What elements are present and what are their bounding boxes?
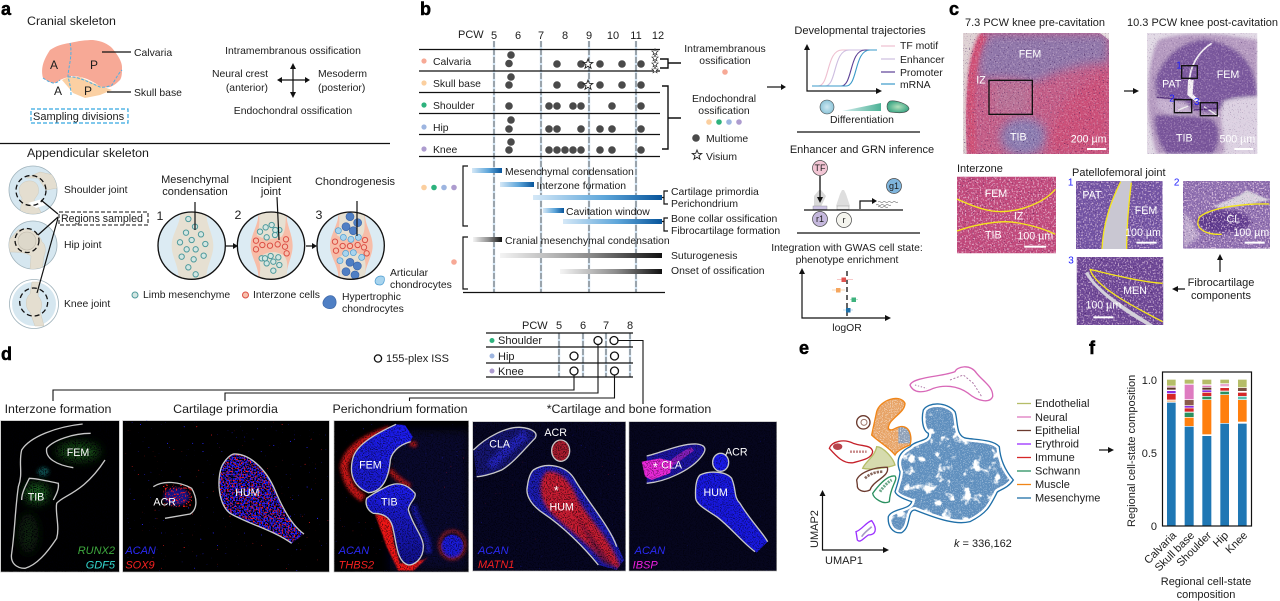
divider — [0, 142, 390, 144]
image: patellofemoral close-up 3: MEN — [1123, 285, 1147, 297]
ISS sample markers — [570, 336, 618, 375]
image: patellofemoral close-up 3: 3 — [1068, 256, 1074, 267]
analysis: enhancer and GRN inference: TF — [814, 163, 826, 173]
timeline axis: post-conception weeks: 9 — [586, 30, 592, 42]
developmental windows: appendicular: Mesenchymal condensation — [505, 167, 634, 178]
image: post-cavitation knee section: FEM — [1217, 69, 1239, 81]
divider — [797, 131, 920, 133]
image: post-cavitation knee section: PAT — [1162, 78, 1182, 90]
image: post-cavitation knee section: 1 — [1176, 60, 1182, 71]
y axis ticks: 0.5 — [1142, 448, 1157, 460]
image: ACAN IBSP section: ACR — [725, 447, 748, 459]
cluster: mesenchyme — [887, 400, 1017, 537]
analysis: GWAS integration forest plot: phenotype enrichment — [796, 255, 899, 266]
panel c: knee histology — [949, 0, 1278, 325]
analysis: developmental trajectories — [794, 25, 945, 126]
arrow between sections — [1124, 88, 1139, 94]
timeline axis: post-conception weeks: 5 — [491, 30, 497, 42]
stage labels: Chondrogenesis — [315, 176, 396, 188]
stage 1: mesenchymal condensation — [158, 210, 225, 282]
connectors from ISS samples to sections — [53, 340, 643, 404]
ossification axis diagram: Endochondral ossification — [234, 106, 352, 117]
label: hip joint: Hip joint — [64, 240, 102, 251]
callout: fibrocartilage components: Fibrocartilage — [1188, 277, 1254, 289]
section headings: Cartilage primordia — [173, 402, 278, 416]
analysis: developmental trajectories: TF motif — [900, 41, 938, 52]
label: skull base — [107, 88, 182, 99]
heading: appendicular skeleton: Appendicular skeleton — [27, 146, 149, 160]
ossification axis diagram: (anterior) — [226, 83, 268, 94]
image: ACAN SOX9 section: SOX9 — [125, 560, 155, 572]
image: interzone close-up: 100 µm — [1017, 231, 1053, 243]
cluster: epithelial large — [857, 467, 888, 491]
timeline axis: post-conception weeks: 12 — [652, 30, 664, 42]
bar: Knee — [1238, 380, 1247, 526]
ossification brackets and legend: Endochondral — [692, 94, 756, 105]
legend: cell classes: Schwann — [1035, 466, 1080, 478]
ISS sampling table: 6 — [580, 320, 586, 332]
label: calvaria — [102, 48, 172, 59]
ossification axis diagram: Intramembranous ossification — [225, 46, 361, 57]
legend: cell classes: Erythroid — [1035, 438, 1079, 450]
legend: cell types: Interzone cells — [253, 290, 320, 301]
developmental windows: cranial — [451, 236, 765, 292]
cluster: erythroid — [856, 521, 875, 541]
panel e: UMAP — [799, 338, 1114, 567]
timeline axis: post-conception weeks: 11 — [630, 30, 642, 42]
image: ACAN THBS2 section: TIB — [381, 497, 398, 509]
legend: cell classes: Immune — [1035, 452, 1075, 464]
image: ACAN THBS2 section: THBS2 — [339, 560, 374, 572]
developmental windows: appendicular: Perichondrium — [671, 199, 738, 210]
stage labels: 3 — [316, 208, 323, 222]
legend: 155-plex ISS: 155-plex ISS — [386, 353, 449, 365]
cluster: neural — [910, 367, 993, 401]
analysis: enhancer and GRN inference — [790, 144, 934, 228]
ISS sampling table: Hip — [498, 351, 515, 363]
bar: Hip — [1220, 380, 1229, 526]
analysis: GWAS integration forest plot: Integration with GWAS cell state: — [771, 243, 923, 254]
image: ACAN IBSP section — [629, 422, 777, 572]
timeline axis: post-conception weeks: 6 — [515, 30, 521, 42]
image: patellofemoral close-up 1: 1 — [1068, 177, 1074, 188]
image: RUNX2 GDF5 section: TIB — [28, 492, 44, 504]
stage labels: condensation — [162, 186, 228, 198]
UMAP clusters — [829, 367, 1017, 541]
stage 3: chondrogenesis — [317, 210, 384, 282]
section headings: *Cartilage and bone formation — [547, 402, 711, 416]
developmental windows: cranial: Cranial mesenchymal condensation — [505, 236, 670, 247]
ossification axis diagram: Mesoderm — [318, 69, 367, 80]
image: ACAN IBSP section: HUM — [704, 487, 728, 499]
analysis: developmental trajectories: mRNA — [900, 80, 931, 91]
developmental windows: appendicular — [421, 166, 780, 237]
stage 2: incipient joint — [237, 210, 305, 282]
legend: cell types: Hypertrophic — [342, 292, 401, 303]
image: interzone close-up: TIB — [985, 230, 1002, 242]
analysis: developmental trajectories: Differentiation — [830, 115, 894, 126]
x axis labels: Shoulder — [1174, 529, 1214, 569]
image: ACAN MATN1 section: CLA — [489, 438, 511, 450]
image: ACAN IBSP section: * — [653, 461, 658, 475]
image: post-cavitation knee section: TIB — [1176, 133, 1193, 145]
legend: cell classes: Mesenchyme — [1035, 492, 1100, 504]
image: post-cavitation knee section: 2 — [1169, 93, 1175, 104]
image: pre-cavitation knee section: 200 µm — [1071, 134, 1107, 146]
title: pre-cavitation: 7.3 PCW knee pre-cavitation — [965, 17, 1105, 29]
image: RUNX2 GDF5 section: RUNX2 — [78, 545, 115, 557]
label: skull base: Skull base — [134, 88, 182, 99]
image: post-cavitation knee section: 3 — [1194, 97, 1200, 108]
legend: sampling divisions: Sampling divisions — [33, 111, 125, 123]
image: patellofemoral close-up 1 — [1068, 177, 1163, 249]
image: patellofemoral close-up 2: 2 — [1174, 177, 1180, 188]
ISS sampling table — [486, 320, 633, 378]
callout: regions sampled: Regions sampled — [61, 213, 143, 225]
sample table rows: Knee — [433, 145, 457, 156]
legend: cell classes — [1017, 398, 1100, 504]
sample table rows: Calvaria — [433, 57, 471, 68]
y axis ticks: 1.0 — [1142, 375, 1157, 387]
legend: cell classes: Epithelial — [1035, 425, 1080, 437]
image: ACAN MATN1 section: HUM — [550, 501, 574, 513]
ossification brackets and legend: ossification — [698, 106, 750, 117]
image: patellofemoral close-up 1: PAT — [1082, 189, 1102, 201]
legend: cell classes: Endothelial — [1035, 398, 1089, 410]
image: post-cavitation knee section: 500 µm — [1219, 134, 1255, 146]
stage labels: 2 — [235, 208, 242, 222]
analysis: developmental trajectories: Promoter — [900, 68, 943, 79]
image: ACAN IBSP section: CLA — [661, 459, 683, 471]
UMAP axes — [809, 490, 889, 567]
icon: shoulder joint — [9, 166, 58, 214]
ISS sampling table: 5 — [556, 320, 562, 332]
icon: skull with calvaria and skull base: A — [54, 84, 62, 98]
arrow to composition chart — [1099, 447, 1114, 453]
analysis: developmental trajectories: Developmental trajectories — [794, 25, 926, 37]
image: patellofemoral close-up 1: FEM — [1135, 205, 1157, 217]
stage labels: joint — [260, 186, 281, 198]
x axis title: composition — [1177, 589, 1235, 601]
stage labels: Mesenchymal — [161, 174, 229, 186]
section headings — [5, 402, 711, 416]
legend: cell types: chondrocytes — [342, 304, 404, 315]
annotation: cell count: k = 336,162 — [954, 538, 1012, 550]
image: pre-cavitation knee section: TIB — [1010, 131, 1027, 143]
callout: fibrocartilage components: components — [1191, 290, 1251, 302]
sample table rows: Skull base — [433, 79, 481, 90]
x axis labels: Hip — [1211, 530, 1231, 550]
icon: skull with calvaria and skull base — [42, 40, 122, 98]
image: patellofemoral close-up 3 — [1068, 256, 1163, 325]
image: ACAN THBS2 section: FEM — [359, 459, 382, 471]
image: patellofemoral close-up 2 — [1174, 177, 1270, 249]
developmental windows: appendicular: Interzone formation — [536, 181, 626, 192]
panel label f: f — [1089, 338, 1096, 358]
cluster: immune — [829, 441, 873, 463]
stage labels — [157, 174, 396, 223]
developmental windows: cranial: Suturogenesis — [671, 251, 737, 262]
x axis labels: Calvaria — [1142, 529, 1180, 567]
image: ACAN THBS2 section: ACAN — [338, 545, 369, 557]
stage labels: 1 — [157, 209, 164, 223]
developmental windows: appendicular: Bone collar ossification — [671, 214, 777, 225]
icon: skull with calvaria and skull base: P — [90, 58, 98, 72]
image: ACAN SOX9 section: ACAN — [124, 545, 156, 557]
ossification brackets and legend: Visium — [706, 152, 737, 163]
x axis labels: Knee — [1223, 530, 1250, 556]
callout: fibrocartilage components — [1172, 254, 1254, 302]
panel label e: e — [799, 338, 809, 358]
image: pre-cavitation knee section: FEM — [1019, 48, 1041, 60]
image: ACAN SOX9 section: HUM — [235, 487, 259, 499]
UMAP axes: UMAP2 — [809, 510, 821, 548]
ISS sampling table: 8 — [627, 320, 633, 332]
cluster: endothelial — [863, 447, 895, 469]
sample table rows — [419, 50, 660, 156]
y axis ticks: 0 — [1151, 521, 1157, 533]
histology group — [957, 17, 1278, 325]
heading: interzone: Interzone — [957, 163, 1003, 175]
section headings: Perichondrium formation — [333, 402, 468, 416]
timeline axis: post-conception weeks: 10 — [607, 30, 619, 42]
image: ACAN MATN1 section: MATN1 — [478, 559, 514, 571]
timeline axis: post-conception weeks: PCW — [458, 29, 484, 41]
analysis: enhancer and GRN inference: g1 — [889, 181, 899, 191]
analysis: developmental trajectories: Enhancer — [900, 55, 945, 66]
section headings: Interzone formation — [5, 402, 111, 416]
ossification brackets and legend: ossification — [699, 56, 751, 67]
icon: knee joint — [10, 280, 58, 328]
image: post-cavitation knee section — [1147, 33, 1257, 154]
pointer lines and arrows between stages — [195, 197, 357, 249]
image: interzone close-up — [957, 177, 1056, 253]
x axis title: Regional cell-state — [1161, 576, 1251, 588]
image: interzone close-up: IZ — [1014, 210, 1024, 222]
image: ACAN SOX9 section — [123, 421, 329, 572]
legend: cell types: chondrocytes — [390, 280, 452, 291]
developmental windows: appendicular: Cartilage primordia — [671, 187, 759, 198]
ISS sampling table: Knee — [498, 366, 524, 378]
bar: Skull base — [1185, 380, 1194, 526]
heading: patellofemoral joint: Patellofemoral joint — [1072, 167, 1166, 179]
legend: cell classes: Muscle — [1035, 479, 1070, 491]
cluster: epithelial small — [857, 416, 870, 429]
analysis: GWAS integration forest plot: logOR — [832, 323, 862, 334]
x axis labels: Skull base — [1153, 530, 1197, 574]
ISS sampling table: Shoulder — [498, 335, 542, 347]
visium stars — [583, 49, 658, 89]
image: ACAN SOX9 section: ACR — [153, 497, 176, 509]
ISS sampling table: PCW — [522, 320, 548, 332]
callout: regions sampled — [37, 200, 148, 293]
panel label d: d — [1, 344, 12, 364]
icon: skull with calvaria and skull base: P — [84, 84, 92, 98]
image: pre-cavitation knee section — [963, 33, 1109, 157]
icon: hip joint — [8, 221, 57, 270]
ossification axis diagram — [212, 46, 367, 117]
image: RUNX2 GDF5 section: FEM — [67, 447, 89, 459]
analysis: enhancer and GRN inference: Enhancer and GRN inference — [790, 144, 934, 156]
analysis: GWAS integration forest plot — [771, 243, 923, 334]
stage circles drawn in zoomed coordinates — [158, 210, 384, 282]
legend: cell types: Articular — [390, 268, 429, 279]
image: RUNX2 GDF5 section: GDF5 — [86, 560, 116, 572]
icon: skull with calvaria and skull base: A — [50, 58, 58, 72]
panel b: sampling timeline — [419, 0, 945, 334]
ossification brackets and legend — [660, 44, 766, 163]
image: ACAN IBSP section: ACAN — [634, 545, 665, 557]
legend: cell types — [132, 268, 452, 315]
UMAP axes: UMAP1 — [825, 555, 863, 567]
label: knee joint: Knee joint — [64, 299, 110, 310]
chart frame — [1162, 372, 1252, 526]
image: ACAN IBSP section: IBSP — [633, 560, 658, 572]
analysis: enhancer and GRN inference: r1 — [816, 214, 824, 224]
ossification axis diagram: Neural crest — [212, 69, 268, 80]
image: ACAN THBS2 section — [334, 421, 469, 572]
ISS sampling table: 7 — [603, 320, 609, 332]
multiome dots — [505, 51, 645, 154]
timeline axis: post-conception weeks: 7 — [538, 30, 544, 42]
image: ACAN MATN1 section: ACAN — [477, 545, 509, 557]
title: post-cavitation: 10.3 PCW knee post-cavitation — [1127, 17, 1278, 29]
bar: Shoulder — [1202, 380, 1211, 526]
legend: cell classes: Neural — [1035, 412, 1067, 424]
image: ACAN MATN1 section — [473, 422, 626, 572]
image: patellofemoral close-up 2: CL — [1227, 214, 1240, 226]
analysis: enhancer and GRN inference: r — [842, 215, 846, 225]
panel d: spatial transcriptomics — [1, 320, 777, 572]
image: RUNX2 GDF5 section — [1, 421, 119, 572]
developmental windows: appendicular: Cavitation window — [566, 207, 650, 218]
x axis labels — [1142, 529, 1250, 574]
label: calvaria: Calvaria — [134, 48, 172, 59]
image: ACAN MATN1 section: * — [554, 484, 559, 498]
image: interzone close-up: FEM — [985, 188, 1007, 200]
image: patellofemoral close-up 2: 100 µm — [1233, 227, 1269, 239]
ossification axis diagram: (posterior) — [318, 83, 365, 94]
timeline axis: post-conception weeks: 8 — [562, 30, 568, 42]
image: pre-cavitation knee section: IZ — [976, 75, 986, 87]
stacked bars — [1167, 380, 1247, 526]
stage labels: Incipient — [251, 174, 291, 186]
cluster: muscle — [870, 397, 913, 457]
label: shoulder joint: Shoulder joint — [64, 185, 128, 196]
heading: cranial skeleton: Cranial skeleton — [27, 14, 116, 28]
panel f: stacked bar chart — [1089, 338, 1252, 601]
diagram: stages of joint formation — [157, 174, 396, 282]
sample table rows: Shoulder — [433, 101, 475, 112]
image: patellofemoral close-up 3: 100 µm — [1085, 300, 1121, 312]
ossification brackets and legend: Multiome — [706, 134, 748, 145]
developmental windows: appendicular: Fibrocartilage formation — [671, 226, 780, 237]
legend: cell types: Limb mesenchyme — [143, 290, 230, 301]
ossification brackets and legend: Intramembranous — [684, 44, 766, 55]
arrow to analyses — [767, 84, 786, 90]
image: ACAN MATN1 section: ACR — [544, 427, 567, 439]
x axis title — [1161, 576, 1251, 601]
divider — [797, 232, 920, 234]
y axis ticks — [1142, 375, 1157, 533]
sample table rows: Hip — [433, 123, 449, 134]
y axis title: Regional cell-state composition — [1126, 375, 1138, 527]
timeline axis: post-conception weeks — [458, 29, 664, 292]
cluster: Schwann — [873, 476, 896, 503]
developmental windows: cranial: Onset of ossification — [671, 266, 765, 277]
panel a: skeletal sampling and joint development — [0, 0, 452, 328]
bar: Calvaria — [1167, 380, 1176, 526]
image: patellofemoral close-up 1: 100 µm — [1125, 227, 1161, 239]
